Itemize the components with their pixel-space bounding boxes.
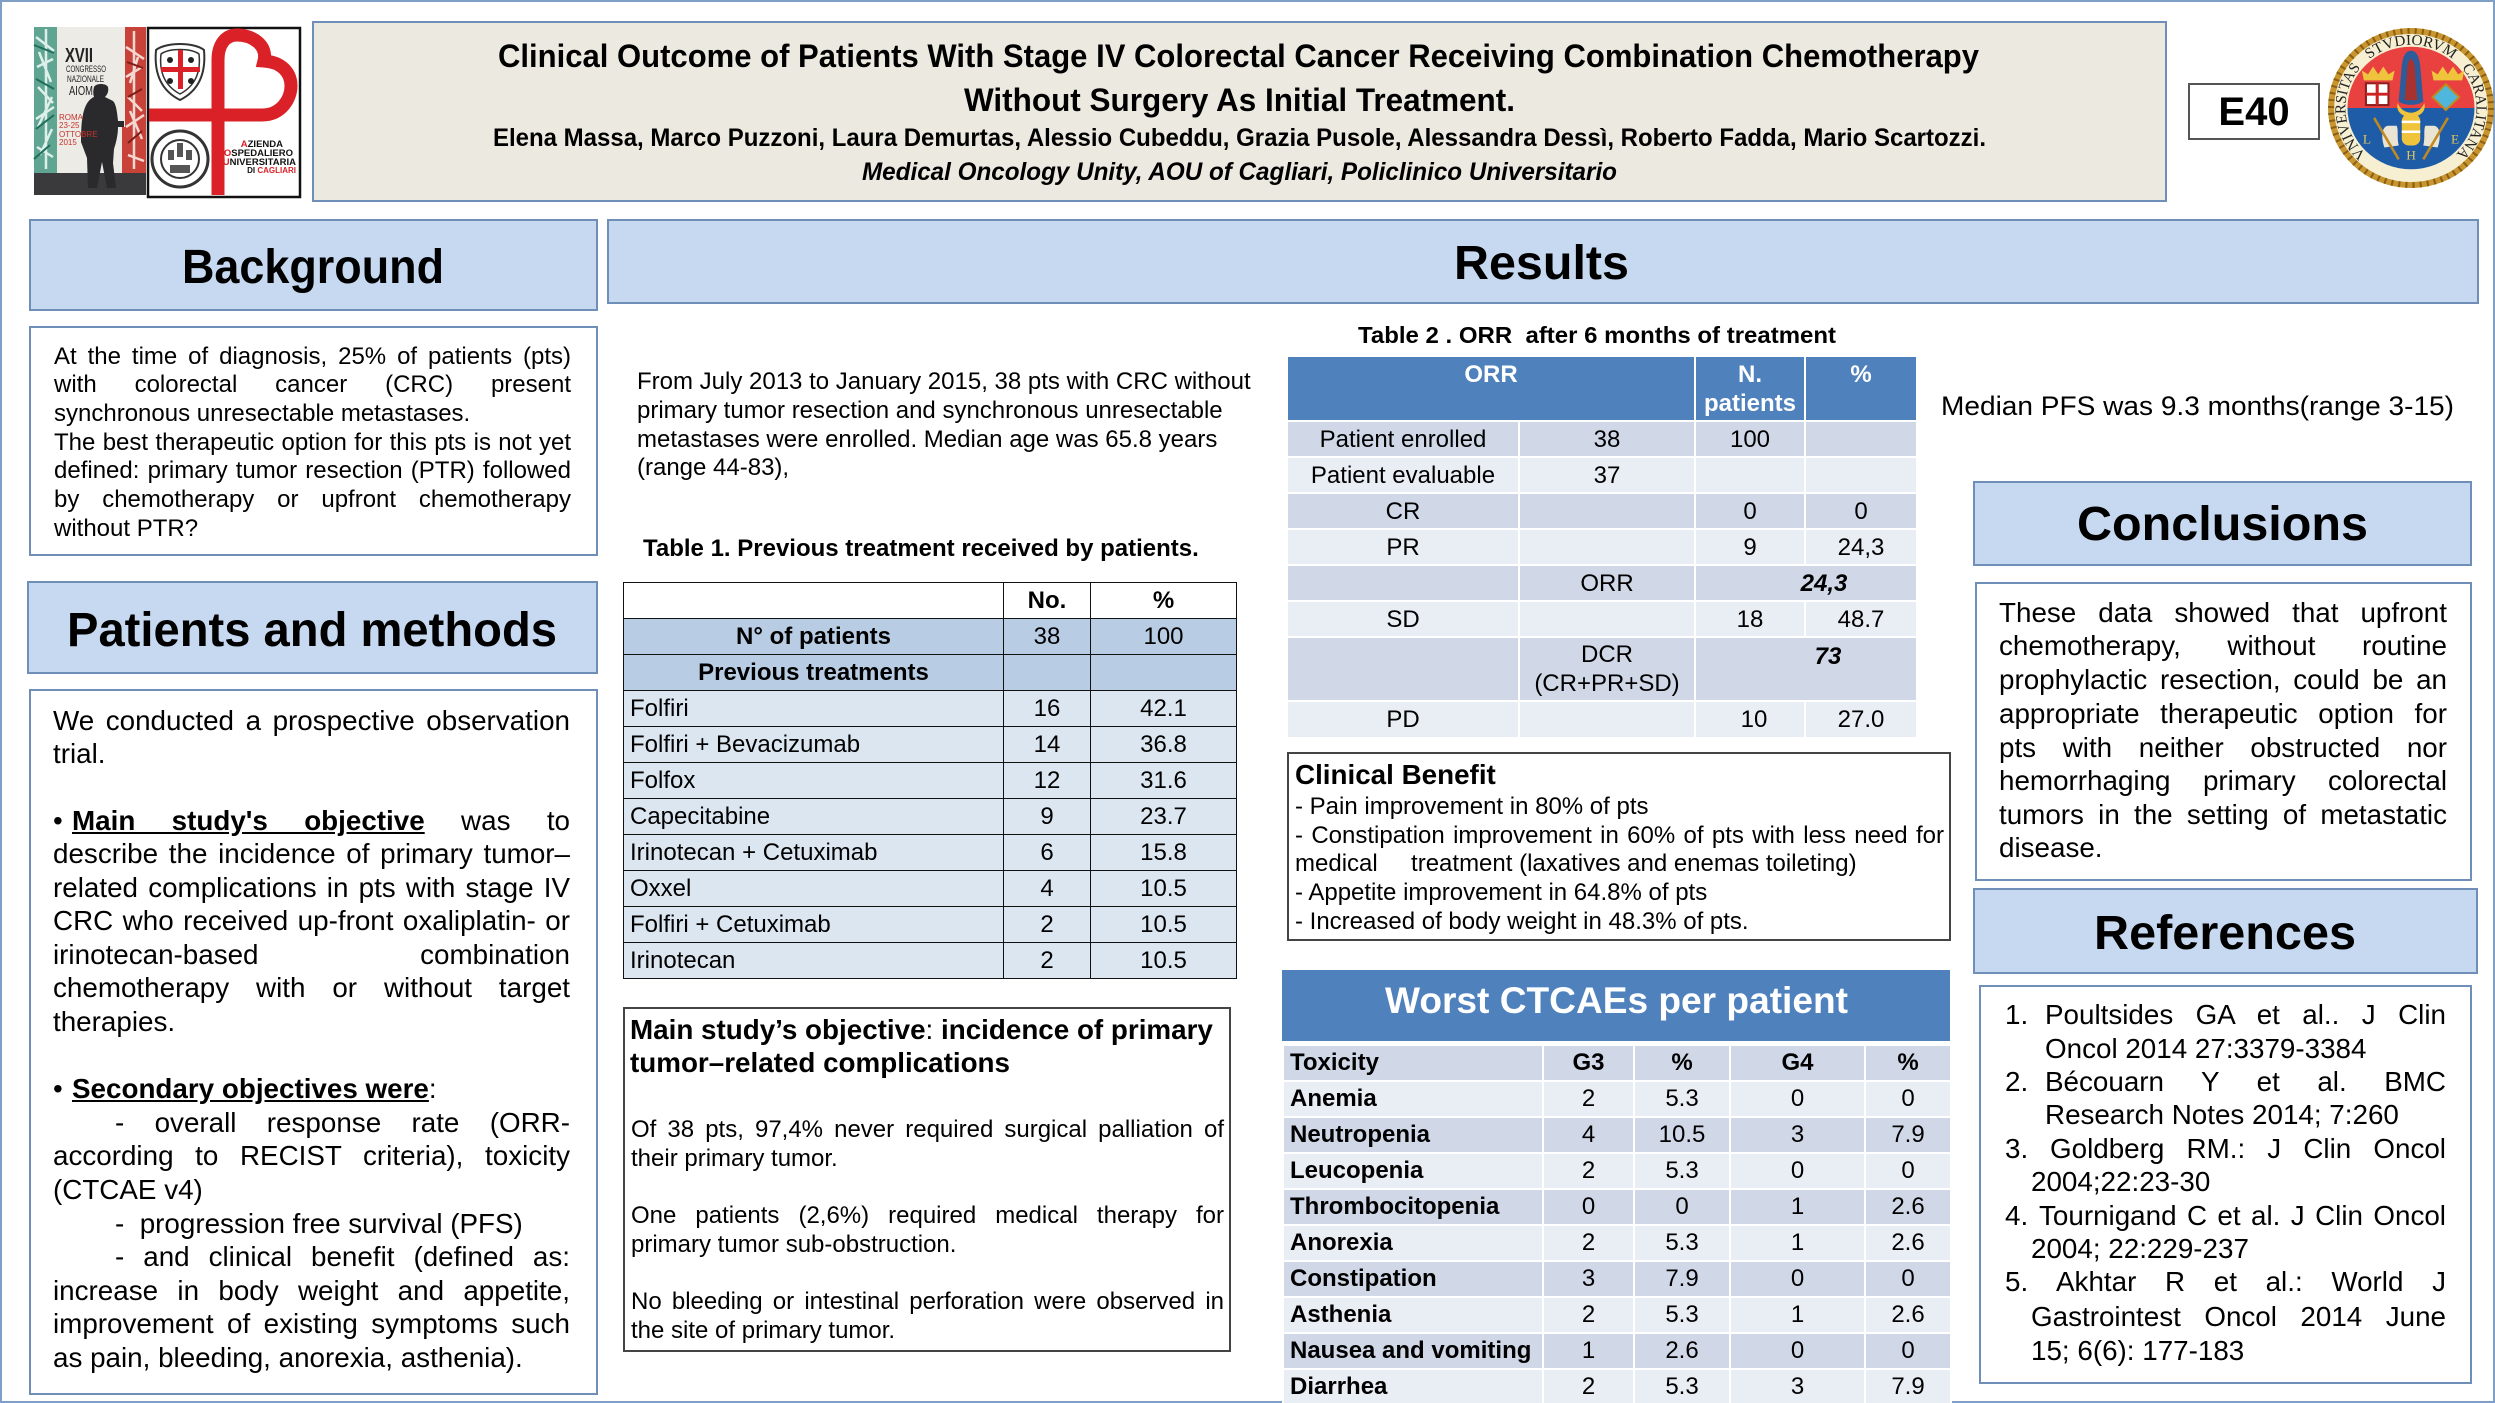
panel: clinical benefit: medical treatment (laxatives and enemas toileting)	[1295, 850, 1857, 876]
logo: Università di Cagliari seal: L	[2363, 132, 2371, 147]
table 2: ORR after 6 months: 0	[1854, 498, 1868, 524]
table 3: worst CTCAEs: 2	[1582, 1229, 1595, 1256]
panel: conclusions text: These data showed that upfront	[1999, 597, 2447, 628]
table 2: ORR after 6 months: 10	[1741, 706, 1767, 733]
table 3: worst CTCAEs	[1282, 1046, 1952, 1403]
panel: references list: 3.	[2005, 1133, 2028, 1164]
table 1: previous treatments: 31.6	[1140, 766, 1187, 794]
table 3: worst CTCAEs: 0	[1791, 1337, 1804, 1364]
table 3: worst CTCAEs: 7.9	[1891, 1121, 1925, 1148]
table 1: previous treatments: 2	[1040, 946, 1054, 974]
panel: references list: 4.	[2005, 1200, 2028, 1231]
table 1: previous treatments: 10.5	[1140, 946, 1187, 974]
table 1: previous treatments: Previous treatments	[698, 658, 929, 686]
table 3: worst CTCAEs: Anemia	[1290, 1085, 1377, 1112]
logo: Università di Cagliari seal	[2328, 28, 2494, 188]
table 3: worst CTCAEs: Constipation	[1290, 1265, 1437, 1292]
table 2: ORR after 6 months: CR	[1386, 498, 1420, 524]
panel: background text: At the time of diagnosis, 25% of patients (pts)	[54, 342, 571, 370]
table 3: worst CTCAEs: 3	[1582, 1265, 1595, 1292]
panel: references list: 1.	[2005, 999, 2028, 1030]
table 1: previous treatments: Folfox	[630, 766, 695, 794]
logo: Azienda Ospedaliero Universitaria di Cagliari: DI CAGLIARI	[247, 166, 296, 175]
logo: Azienda Ospedaliero Universitaria di Cagliari: UNIVERSITARIA	[223, 157, 296, 168]
panel: main study's objective: tumor–related complications	[630, 1047, 1010, 1078]
table 3: worst CTCAEs: %	[1671, 1049, 1693, 1076]
heading: Conclusions	[1973, 481, 2472, 566]
table 3: worst CTCAEs: %	[1897, 1049, 1919, 1076]
table 2: ORR after 6 months: N.	[1738, 361, 1762, 388]
panel: patients and methods text: Main study's objective was to	[72, 805, 570, 836]
panel: conclusions text: chemotherapy, without routine	[1999, 630, 2447, 661]
panel: main study's objective: their primary tumor.	[631, 1144, 838, 1172]
table 1: previous treatments: 38	[1034, 622, 1060, 650]
title text: Clinical Outcome of Patients With Stage IV Colorectal Cancer Receiving Combination Chemotherapy	[498, 38, 1979, 74]
table 1: previous treatments: No.	[1028, 586, 1066, 614]
table 3: worst CTCAEs: 2.6	[1891, 1301, 1925, 1328]
text: Table 2 . ORR after 6 months of treatment	[1358, 322, 1836, 348]
table 3: worst CTCAEs: 7.9	[1665, 1265, 1699, 1292]
table 2: ORR after 6 months: Patient enrolled	[1320, 426, 1486, 452]
panel: references list	[1979, 985, 2472, 1384]
panel: references list: Goldberg RM.: J Clin Oncol	[2050, 1133, 2446, 1164]
table 3: worst CTCAEs: 0	[1791, 1157, 1804, 1184]
table 1 caption: Table 1. Previous treatment received by patients.	[643, 534, 1199, 562]
panel: conclusions text: hemorrhaging primary colorectal	[1999, 765, 2447, 796]
heading: Patients and methods	[27, 581, 598, 674]
panel: conclusions text: pts with neither obstructed nor	[1999, 732, 2447, 763]
logo: AIOM congress poster: CONGRESSO	[66, 64, 106, 74]
panel: references list: Poultsides GA et al.. J Clin	[2045, 999, 2446, 1030]
panel: references list: Tournigand C et al. J Clin Oncol	[2039, 1200, 2446, 1231]
results introduction: (range 44-83),	[637, 454, 789, 480]
heading: Results	[607, 219, 2479, 304]
table 3: worst CTCAEs: Asthenia	[1290, 1301, 1391, 1328]
panel: clinical benefit: - Increased of body weight in 48.3% of pts.	[1295, 908, 1749, 934]
panel: clinical benefit: Clinical Benefit	[1295, 759, 1496, 790]
heading: Conclusions: Conclusions	[2077, 498, 2368, 551]
panel: patients and methods text: Secondary objectives were:	[72, 1073, 437, 1104]
results introduction: metastases were enrolled. Median age was 65.8 years	[637, 426, 1217, 452]
table 1: previous treatments: Irinotecan + Cetuximab	[630, 838, 877, 866]
panel: patients and methods text: - progression free survival (PFS)	[115, 1208, 523, 1239]
table 3: worst CTCAEs: 4	[1582, 1121, 1595, 1148]
panel: patients and methods text: irinotecan-based combination	[53, 939, 570, 970]
panel: main study's objective: the site of primary tumor.	[631, 1316, 895, 1344]
table 2: ORR after 6 months: 73	[1815, 643, 1841, 670]
table 2: ORR after 6 months: (CR+PR+SD)	[1534, 670, 1680, 697]
panel: clinical benefit: - Appetite improvement in 64.8% of pts	[1295, 878, 1707, 906]
table 3: worst CTCAEs: Leucopenia	[1290, 1157, 1423, 1184]
table 2: ORR after 6 months: Patient evaluable	[1311, 462, 1495, 488]
table 3: worst CTCAEs: Thrombocitopenia	[1290, 1193, 1499, 1220]
poster code E40	[2188, 83, 2320, 140]
logo: AIOM congress poster: XVII	[65, 45, 93, 67]
panel: patients and methods text: chemotherapy with or without target	[53, 972, 570, 1003]
panel: patients and methods text: We conducted a prospective observation	[53, 705, 570, 736]
panel: main study's objective: Of 38 pts, 97,4% never required surgical palliation of	[631, 1116, 1224, 1142]
table 3: worst CTCAEs: Nausea and vomiting	[1290, 1337, 1531, 1364]
table 2: ORR after 6 months: 38	[1594, 426, 1620, 452]
table 2: ORR after 6 months: 24,3	[1801, 570, 1847, 596]
table 3: worst CTCAEs: 0	[1582, 1193, 1595, 1220]
panel: main study's objective: No bleeding or intestinal perforation were observed in	[631, 1288, 1224, 1314]
heading bar: Worst CTCAEs per patient: Worst CTCAEs per patient	[1385, 980, 1848, 1021]
panel: patients and methods text: - and clinical benefit (defined as:	[115, 1241, 570, 1272]
table 1: previous treatments: Capecitabine	[630, 802, 770, 830]
panel: conclusions text: appropriate therapeutic option for	[1999, 698, 2447, 729]
logo: AIOM congress poster	[33, 27, 146, 195]
logo: Università di Cagliari seal: VNIVERSITAS	[2335, 62, 2363, 161]
table 3: worst CTCAEs: 7.9	[1891, 1373, 1925, 1400]
table 3: worst CTCAEs: G3	[1572, 1049, 1604, 1076]
logo: Università di Cagliari seal: H	[2406, 148, 2416, 162]
panel: patients and methods text: improvement of existing symptoms such	[53, 1308, 570, 1339]
table 3: worst CTCAEs: Diarrhea	[1290, 1373, 1387, 1400]
table 1: previous treatments: Folfiri	[630, 694, 689, 722]
table 1: previous treatments: 2	[1040, 910, 1054, 938]
table 2: ORR after 6 months: 48.7	[1838, 606, 1884, 632]
table 3: worst CTCAEs: 0	[1675, 1193, 1689, 1220]
table 1: previous treatments: 36.8	[1140, 730, 1187, 758]
table 3: worst CTCAEs: 1	[1791, 1193, 1804, 1220]
heading: Results: Results	[1454, 237, 1629, 290]
table 2: ORR after 6 months: DCR	[1581, 641, 1633, 668]
table 2: ORR after 6 months: ORR	[1580, 570, 1634, 596]
table 3: worst CTCAEs: 5.3	[1665, 1157, 1699, 1184]
text: Median PFS was 9.3 months(range 3-15)	[1941, 391, 2454, 421]
panel: clinical benefit	[1287, 752, 1951, 941]
heading: References	[1973, 888, 2478, 974]
heading: Background: Background	[182, 241, 444, 294]
table 1: previous treatments: 10.5	[1140, 910, 1187, 938]
title panel	[312, 21, 2167, 202]
panel: references list: Akhtar R et al.: World J	[2056, 1266, 2446, 1297]
panel: background text: The best therapeutic option for this pts is not yet	[54, 428, 571, 456]
panel: main study's objective: primary tumor sub-obstruction.	[631, 1230, 956, 1258]
table 1: previous treatments: Oxxel	[630, 874, 691, 902]
table 2: ORR after 6 months: PR	[1386, 534, 1420, 560]
panel: patients and methods text: (CTCAE v4)	[53, 1174, 203, 1205]
table 1: previous treatments: 10.5	[1140, 874, 1187, 902]
table 1: previous treatments: 6	[1040, 838, 1054, 866]
panel: main study's objective: Main study’s objective: incidence of primary	[630, 1014, 1213, 1045]
table 2: ORR after 6 months: 24,3	[1838, 534, 1884, 560]
table 2: ORR after 6 months: 0	[1743, 498, 1757, 524]
table 3: worst CTCAEs: 0	[1791, 1265, 1804, 1292]
panel: references list: 2.	[2005, 1066, 2028, 1097]
title text: Without Surgery As Initial Treatment.	[964, 82, 1515, 118]
logo: Azienda Ospedaliero Universitaria di Cagliari: OSPEDALIERO	[224, 148, 293, 159]
table 2: ORR after 6 months: patients	[1704, 390, 1796, 417]
table 2: ORR after 6 months: PD	[1386, 706, 1420, 733]
title text	[498, 38, 1979, 118]
table 2: ORR after 6 months: 9	[1743, 534, 1757, 560]
table 3: worst CTCAEs: 2	[1582, 1157, 1595, 1184]
table 2: ORR after 6 months: 37	[1594, 462, 1620, 488]
authors: Elena Massa, Marco Puzzoni, Laura Demurtas, Alessio Cubeddu, Grazia Pusole, Alessandra Dessì, Roberto Fadda, Mario Scartozzi.	[493, 124, 1986, 152]
panel: patients and methods text: therapies.	[53, 1006, 175, 1037]
table 1: previous treatments: %	[1153, 586, 1174, 614]
table 3: worst CTCAEs: 2.6	[1891, 1193, 1925, 1220]
table 1: previous treatments	[623, 582, 1237, 979]
table 1: previous treatments: Irinotecan	[630, 946, 735, 974]
panel: patients and methods text: related complications in pts with stage IV	[53, 872, 570, 903]
panel: patients and methods text: describe the incidence of primary tumor–	[53, 838, 570, 869]
panel: references list: Research Notes 2014; 7:260	[2045, 1099, 2399, 1130]
logo: Azienda Ospedaliero Universitaria di Cagliari: AZIENDA	[241, 139, 283, 150]
panel: conclusions text: prophylactic resection, could be an	[1999, 664, 2447, 695]
logo: AIOM congress poster: 2015	[59, 138, 77, 147]
table 1: previous treatments: Folfiri + Cetuximab	[630, 910, 831, 938]
panel: main study's objective	[623, 1007, 1231, 1352]
panel: clinical benefit: - Constipation improvement in 60% of pts with less need for	[1295, 822, 1944, 848]
table 3: worst CTCAEs: Neutropenia	[1290, 1121, 1430, 1148]
panel: background text	[29, 326, 598, 556]
table 2: ORR after 6 months: ORR	[1464, 361, 1518, 388]
panel: conclusions text	[1975, 582, 2472, 881]
table 3: worst CTCAEs: 5.3	[1665, 1229, 1699, 1256]
panel: patients and methods text: according to RECIST criteria), toxicity	[53, 1140, 570, 1171]
table 3: worst CTCAEs: 0	[1901, 1337, 1915, 1364]
logo: Università di Cagliari seal: E	[2451, 132, 2459, 147]
table 1: previous treatments: 12	[1034, 766, 1060, 794]
panel: references list: 2004;22:23-30	[2031, 1166, 2210, 1197]
panel: references list: Gastrointest Oncol 2014 June	[2031, 1301, 2446, 1332]
results introduction: From July 2013 to January 2015, 38 pts with CRC without	[637, 368, 1251, 394]
table 3: worst CTCAEs: 3	[1791, 1121, 1804, 1148]
table 2: ORR after 6 months	[1288, 357, 1916, 737]
logo: AIOM congress poster: ROMA	[59, 113, 84, 122]
panel: references list: 2004; 22:229-237	[2031, 1233, 2249, 1264]
table 1: previous treatments: 100	[1143, 622, 1184, 650]
table 1: previous treatments: 4	[1040, 874, 1054, 902]
results introduction: primary tumor resection and synchronous unresectable	[637, 396, 1223, 424]
panel: main study's objective: One patients (2,6%) required medical therapy for	[631, 1202, 1224, 1228]
table 3: worst CTCAEs: 1	[1582, 1337, 1595, 1364]
heading: Background	[29, 219, 598, 311]
table 2: ORR after 6 months: %	[1850, 361, 1872, 388]
panel: background text: with colorectal cancer (CRC) present	[54, 370, 571, 398]
logo: AIOM congress poster: NAZIONALE	[67, 74, 104, 84]
table 3: worst CTCAEs: 1	[1791, 1229, 1804, 1256]
table 1: previous treatments: 14	[1034, 730, 1060, 758]
panel: patients and methods text: •	[53, 1073, 63, 1104]
heading: References: References	[2094, 907, 2356, 960]
table 1: previous treatments: 16	[1034, 694, 1060, 722]
table 3: worst CTCAEs: 2.6	[1891, 1229, 1925, 1256]
panel: background text: without PTR?	[54, 514, 198, 542]
table 1: previous treatments: 23.7	[1140, 802, 1187, 830]
panel: clinical benefit: - Pain improvement in 80% of pts	[1295, 792, 1648, 820]
panel: patients and methods text: trial.	[53, 738, 106, 769]
table 3: worst CTCAEs: 0	[1901, 1265, 1915, 1292]
table 1: previous treatments: 15.8	[1140, 838, 1187, 866]
panel: background text: defined: primary tumor resection (PTR) followed	[54, 456, 571, 484]
panel: patients and methods text: as pain, bleeding, anorexia, asthenia).	[53, 1342, 523, 1373]
heading bar: Worst CTCAEs per patient	[1282, 970, 1950, 1041]
table 3: worst CTCAEs: 2.6	[1665, 1337, 1699, 1364]
table 3: worst CTCAEs: Toxicity	[1290, 1049, 1379, 1076]
table 2: ORR after 6 months: 18	[1737, 606, 1763, 632]
table 3: worst CTCAEs: 5.3	[1665, 1301, 1699, 1328]
poster code E40: E40	[2218, 90, 2290, 134]
logo: AIOM congress poster: OTTOBRE	[59, 130, 98, 139]
panel: references list: 15; 6(6): 177-183	[2031, 1335, 2244, 1366]
table 3: worst CTCAEs: 0	[1791, 1085, 1804, 1112]
logo: AIOM congress poster: 23-25	[59, 121, 80, 130]
table 3: worst CTCAEs: 5.3	[1665, 1373, 1699, 1400]
affiliation: Medical Oncology Unity, AOU of Cagliari, Policlinico Universitario	[862, 158, 1617, 186]
panel: patients and methods text: - overall response rate (ORR-	[115, 1107, 570, 1138]
table 3: worst CTCAEs: 2	[1582, 1301, 1595, 1328]
heading: Patients and methods: Patients and methods	[67, 604, 557, 657]
table 3: worst CTCAEs: Anorexia	[1290, 1229, 1393, 1256]
table 3: worst CTCAEs: G4	[1781, 1049, 1814, 1076]
table 3: worst CTCAEs: 5.3	[1665, 1085, 1699, 1112]
table 2: ORR after 6 months: SD	[1386, 606, 1420, 632]
logo: Azienda Ospedaliero Universitaria di Cagliari	[146, 26, 302, 198]
table 3: worst CTCAEs: 0	[1901, 1085, 1915, 1112]
table 3: worst CTCAEs: 3	[1791, 1373, 1804, 1400]
panel: background text: synchronous unresectable metastases.	[54, 400, 470, 426]
table 3: worst CTCAEs: 0	[1901, 1157, 1915, 1184]
panel: patients and methods text: increase in body weight and appetite,	[53, 1275, 570, 1306]
panel: patients and methods text: CRC who received up-front oxaliplatin- or	[53, 905, 570, 936]
logo: Università di Cagliari seal: CARALITANA	[2456, 64, 2487, 158]
panel: references list: 5.	[2005, 1266, 2028, 1297]
results introduction	[637, 368, 1251, 480]
table 3: worst CTCAEs: 1	[1791, 1301, 1804, 1328]
table 3: worst CTCAEs: 2	[1582, 1373, 1595, 1400]
logo: Università di Cagliari seal: STVDIORVM	[2365, 35, 2458, 59]
table 2: ORR after 6 months: 100	[1730, 426, 1770, 452]
panel: conclusions text: disease.	[1999, 832, 2103, 863]
logo: AIOM congress poster: AIOM	[69, 83, 93, 98]
table 3: worst CTCAEs: 2	[1582, 1085, 1595, 1112]
panel: background text: by chemotherapy or upfront chemotherapy	[54, 486, 571, 512]
table 1: previous treatments: N° of patients	[736, 622, 891, 650]
table 1: previous treatments: 42.1	[1140, 694, 1187, 722]
table 2: ORR after 6 months: 27.0	[1838, 706, 1884, 733]
table 1: previous treatments: 9	[1040, 802, 1054, 830]
panel: patients and methods text	[29, 689, 598, 1395]
panel: references list: Bécouarn Y et al. BMC	[2045, 1066, 2446, 1097]
table 3: worst CTCAEs: 10.5	[1659, 1121, 1705, 1148]
panel: conclusions text: tumors in the setting of metastatic	[1999, 799, 2447, 830]
panel: references list: Oncol 2014 27:3379-3384	[2045, 1033, 2366, 1064]
panel: patients and methods text: •	[53, 805, 63, 836]
table 1: previous treatments: Folfiri + Bevacizumab	[630, 730, 860, 758]
